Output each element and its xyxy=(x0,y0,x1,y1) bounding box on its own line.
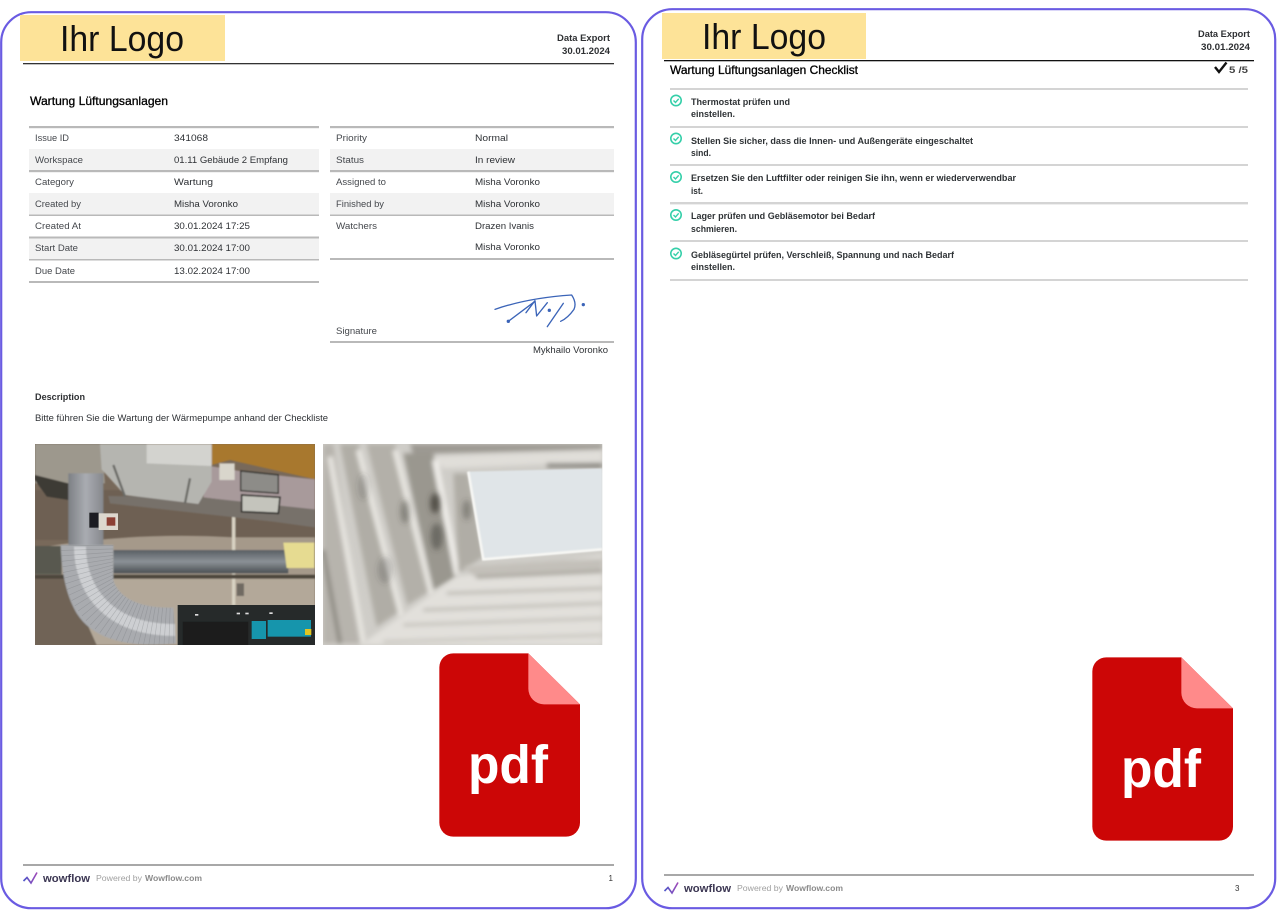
details table left: Created At xyxy=(35,221,82,231)
export info page 1: 30.01.2024 xyxy=(562,46,610,56)
footer page 1: Powered by xyxy=(96,874,142,883)
details table left: 01.11 Gebäude 2 Empfang xyxy=(174,155,288,165)
checklist progress: 5 /5 xyxy=(1229,65,1249,76)
export info page 1 xyxy=(557,33,610,56)
footer page 1: wowflow xyxy=(42,873,90,885)
footer page 3: wowflow xyxy=(683,883,731,895)
icon: pdf file page 1 xyxy=(439,653,580,837)
details table right xyxy=(330,126,614,260)
details table left: Issue ID xyxy=(35,133,70,143)
item 1: einstellen. xyxy=(691,109,735,119)
details table left xyxy=(29,126,319,283)
photo: ventilation ducts xyxy=(35,444,315,645)
details table left: Misha Voronko xyxy=(174,199,238,209)
description xyxy=(35,392,328,423)
details table left: Created by xyxy=(35,199,82,209)
details table left: Due Date xyxy=(35,266,75,276)
details table right: Finished by xyxy=(336,199,385,209)
item 5 xyxy=(671,248,955,272)
details table right: Misha Voronko xyxy=(475,177,540,187)
footer page 3: Powered by xyxy=(737,884,783,893)
details table right: Misha Voronko xyxy=(475,242,540,252)
footer page 3 xyxy=(664,874,1254,895)
description: Description xyxy=(35,392,85,402)
footer page 1: Wowflow.com xyxy=(145,874,202,883)
item 4: schmieren. xyxy=(691,224,737,234)
details table left: 13.02.2024 17:00 xyxy=(174,266,250,276)
details table left: Workspace xyxy=(35,155,83,165)
icon: pdf file page 3: pdf xyxy=(1121,739,1202,799)
export info page 1: Data Export xyxy=(557,33,610,43)
item 2 xyxy=(671,133,973,158)
details table right: Normal xyxy=(475,133,508,143)
item 2: Stellen Sie sicher, dass die Innen- und Außengeräte eingeschaltet xyxy=(691,136,973,146)
details table left: 30.01.2024 17:25 xyxy=(174,221,250,231)
icon: pdf file page 1: pdf xyxy=(468,735,549,795)
logo placeholder page 3: Ihr Logo xyxy=(702,16,826,57)
details table right: Drazen Ivanis xyxy=(475,221,535,231)
item 1: Thermostat prüfen und xyxy=(691,97,790,107)
signature block: Signature xyxy=(336,326,377,336)
item 4: Lager prüfen und Gebläsemotor bei Bedarf xyxy=(691,211,876,221)
report title: Wartung Lüftungsanlagen xyxy=(30,94,168,108)
logo placeholder page 1 xyxy=(20,15,225,61)
item 3: Ersetzen Sie den Luftfilter oder reinigen Sie ihn, wenn er wiederverwendbar xyxy=(691,173,1016,183)
details table right: Status xyxy=(336,155,365,165)
details table right: Watchers xyxy=(336,221,378,231)
item 4 xyxy=(671,210,876,234)
footer page 1: 1 xyxy=(608,874,614,883)
item 1 xyxy=(671,95,790,119)
logo placeholder page 1: Ihr Logo xyxy=(60,18,184,59)
details table left: Wartung xyxy=(174,177,213,187)
icon: pdf file page 3 xyxy=(1092,657,1233,841)
footer page 1 xyxy=(23,864,614,885)
checklist title: Wartung Lüftungsanlagen Checklist xyxy=(670,63,859,77)
checklist items xyxy=(670,88,1248,281)
export info page 3: 30.01.2024 xyxy=(1201,42,1250,52)
checklist progress xyxy=(1215,62,1249,76)
description: Bitte führen Sie die Wartung der Wärmepumpe anhand der Checkliste xyxy=(35,413,328,423)
logo placeholder page 3 xyxy=(662,13,866,59)
details table right: In review xyxy=(475,155,516,165)
panel: page 1 xyxy=(1,12,636,908)
signature block: Mykhailo Voronko xyxy=(533,345,608,355)
item 5: Gebläsegürtel prüfen, Verschleiß, Spannung und nach Bedarf xyxy=(691,250,955,260)
export info page 3: Data Export xyxy=(1198,29,1250,39)
details table right: Misha Voronko xyxy=(475,199,540,209)
details table left: 341068 xyxy=(174,133,208,143)
photo: dusty air vent xyxy=(323,444,602,645)
signature block xyxy=(330,295,614,355)
panel: page 3 xyxy=(642,9,1275,908)
details table left: Category xyxy=(35,177,75,187)
details table left: Start Date xyxy=(35,243,78,253)
details table right: Priority xyxy=(336,133,368,143)
item 3 xyxy=(671,172,1016,196)
details table left: 30.01.2024 17:00 xyxy=(174,243,250,253)
item 2: sind. xyxy=(691,148,711,158)
footer page 3: Wowflow.com xyxy=(786,884,843,893)
footer page 3: 3 xyxy=(1235,884,1240,893)
item 3: ist. xyxy=(691,186,703,196)
export info page 3 xyxy=(1198,29,1250,52)
details table right: Assigned to xyxy=(336,177,386,187)
item 5: einstellen. xyxy=(691,262,735,272)
